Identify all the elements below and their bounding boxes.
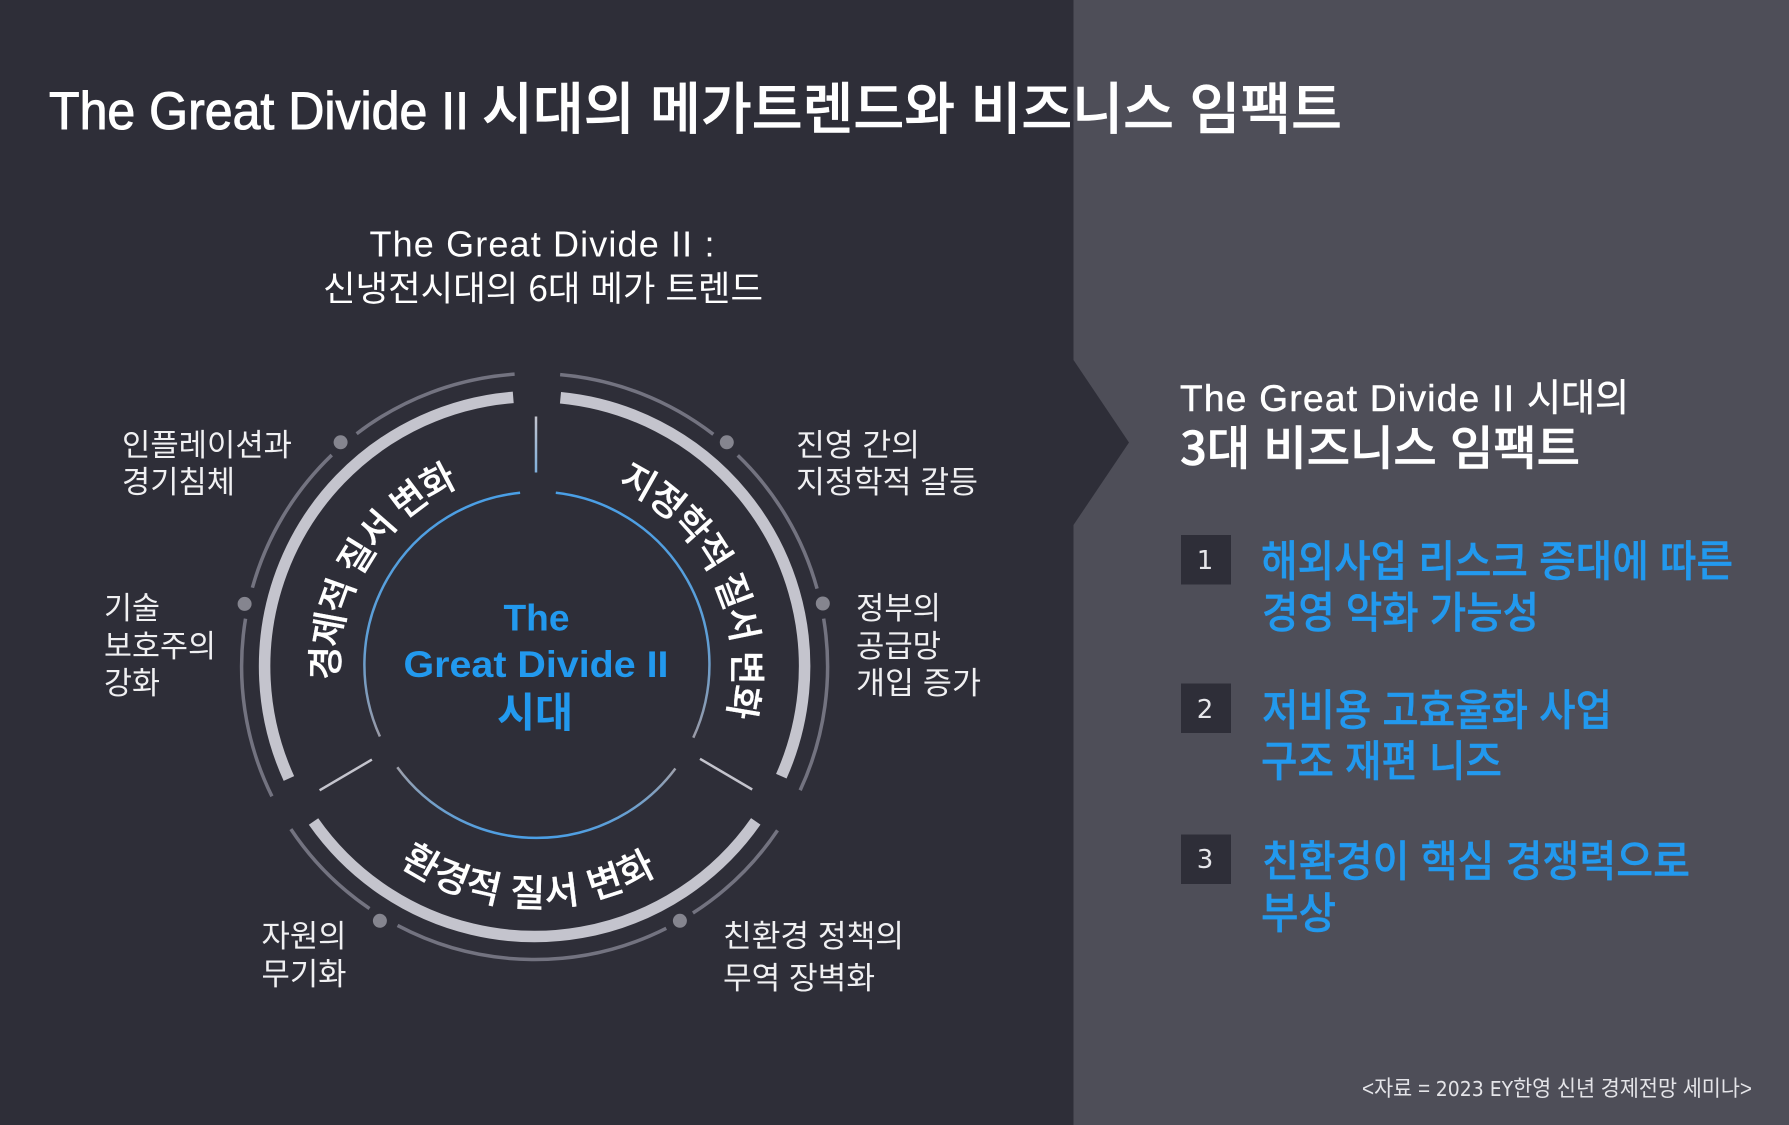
heading: three business impacts: 3대 비즈니스 임팩트 [1180,410,1580,479]
impact item 3 [1181,828,1690,942]
chart: circular mega trend diagram [238,372,830,962]
label: weaponization of resources: 무기화 [262,949,346,994]
heading: three business impacts: 시대의 [1527,367,1629,422]
subtitle: six mega trends heading: 신냉전시대의 6대 메가 트렌드 [323,261,763,312]
center label [404,598,668,739]
heading: three business impacts [1180,367,1629,479]
number 1: 1 [1197,546,1213,576]
impact text 3: 부상 [1261,880,1336,942]
label: inflation and recession [122,420,292,502]
title: 시대의 메가트렌드와 비즈니스 임팩트 [482,65,1342,146]
title [49,65,1342,146]
subtitle: six mega trends heading [323,224,763,312]
center label: Great Divide II [404,644,668,685]
label: weaponization of resources [262,911,346,994]
impact text 2 [1261,676,1612,790]
label: geopolitical conflict between camps [796,420,978,502]
label: tech protectionism: 강화 [104,658,160,703]
label: tech protectionism [104,583,216,703]
center label: 시대 [497,679,573,739]
impact text 2: 저비용 고효율화 사업 [1262,676,1612,738]
label: inflation and recession: 인플레이션과 [122,420,292,465]
inner ring segments [364,493,709,838]
label: eco policy trade barriers [723,911,904,998]
impact text 1 [1261,528,1733,641]
label: inflation and recession: 경기침체 [122,457,235,502]
label: tech protectionism: 보호주의 [104,621,216,666]
impact text 2: 구조 재편 니즈 [1261,728,1502,790]
label: tech protectionism: 기술 [104,583,160,628]
label: government supply chain intervention: 정부의 [856,583,941,628]
number badge 3 [1181,834,1231,884]
source note: <자료 = 2023 EY한영 신년 경제전망 세미나> [1362,1076,1752,1101]
heading: three business impacts: The Great Divide II [1180,378,1514,419]
impact text 3: 친환경이 핵심 경쟁력으로 [1262,828,1690,890]
label: geopolitical conflict between camps: 지정학적 갈등 [796,457,978,502]
curved label: geopolitical order: 지정학적 질서 변화 [622,462,764,719]
arrow: pointer from left panel to right panel [1074,360,1129,525]
number 3: 3 [1197,845,1213,875]
impact item 2 [1181,676,1612,790]
impact item 1 [1181,528,1733,641]
panel: right business impact background [1074,0,1789,1125]
impact text 1: 해외사업 리스크 증대에 따른 [1261,528,1733,590]
subtitle: six mega trends heading: The Great Divide II : [370,224,714,264]
outer thin ring segments [120,252,949,1081]
background: dark left panel [0,0,1074,1125]
number badge 2 [1181,684,1231,733]
trend marker dots [238,435,830,928]
curved label: environmental order: 환경적 질서 변화 [404,842,654,910]
label: eco policy trade barriers: 무역 장벽화 [723,953,875,998]
number 2: 2 [1197,695,1213,725]
label: government supply chain intervention [856,583,981,703]
title: The Great Divide II [49,82,469,141]
label: eco policy trade barriers: 친환경 정책의 [723,911,904,956]
thick ring segments [159,290,911,1043]
label: government supply chain intervention: 공급망 [856,621,941,666]
number badge 1 [1181,535,1231,584]
label: weaponization of resources: 자원의 [262,911,346,956]
label: government supply chain intervention: 개입 증가 [856,658,981,703]
impact text 3 [1261,828,1690,942]
label: geopolitical conflict between camps: 진영 간의 [796,420,920,465]
spokes between sectors [320,416,752,790]
curved label: economic order: 경제적 질서 변화 [308,460,456,678]
impact text 1: 경영 악화 가능성 [1262,579,1539,641]
center label: The [504,598,570,638]
